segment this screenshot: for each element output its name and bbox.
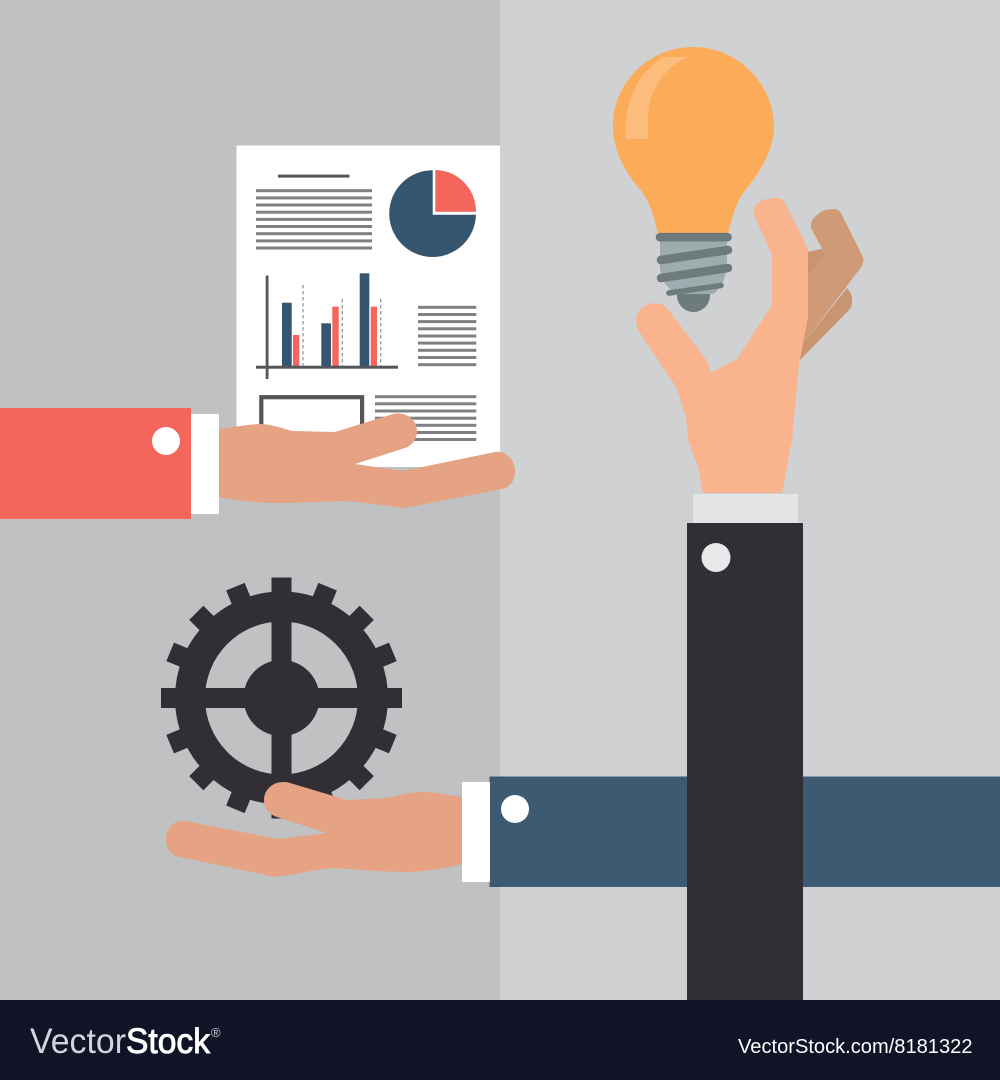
cuff button	[152, 427, 180, 455]
dark sleeve arm holding bulb	[687, 494, 803, 1000]
bar chart	[256, 273, 398, 379]
document title line	[278, 175, 350, 178]
registered mark: ®	[211, 1025, 221, 1040]
white cuff	[462, 782, 490, 882]
text block: top left	[256, 189, 372, 250]
VectorStock logo: Stock	[126, 1022, 210, 1061]
blue sleeve	[490, 776, 1000, 887]
gear spokes	[272, 610, 292, 786]
light cuff	[693, 494, 798, 523]
text block: right of chart	[418, 306, 476, 366]
right background panel	[500, 0, 1000, 1000]
footer bar	[0, 1000, 1000, 1080]
middle back finger	[806, 249, 826, 279]
white cuff	[191, 414, 219, 514]
hand holding bulb	[636, 198, 863, 493]
image placeholder frame	[261, 397, 362, 447]
hand holding document	[219, 413, 515, 508]
upper back finger	[802, 209, 863, 345]
front hand	[636, 198, 808, 493]
hand holding gear	[166, 782, 462, 877]
gear teeth	[161, 578, 402, 818]
bulb glass	[613, 47, 774, 234]
text block: lower right	[375, 395, 476, 441]
dark sleeve	[687, 523, 803, 1000]
light bulb icon	[613, 47, 774, 312]
VectorStock logo: Vector	[30, 1022, 126, 1061]
gear hub	[244, 660, 320, 736]
image id: VectorStock.com/8181322	[738, 1036, 972, 1058]
blue sleeve arm holding gear	[166, 776, 1000, 887]
lower back finger	[798, 288, 852, 362]
red sleeve arm holding document	[0, 408, 515, 519]
screw threads	[660, 237, 728, 293]
bulb highlight	[626, 57, 688, 139]
red sleeve	[0, 408, 191, 519]
report document	[236, 146, 500, 467]
left background panel	[0, 0, 500, 1000]
base cap	[677, 294, 710, 312]
pie chart	[389, 170, 476, 257]
footer background	[0, 1000, 1000, 1080]
cuff button	[501, 795, 529, 823]
paper sheet	[236, 146, 500, 467]
screw base	[660, 238, 727, 294]
gear ring	[190, 606, 373, 790]
gear icon	[161, 578, 402, 818]
cuff button	[702, 543, 730, 572]
